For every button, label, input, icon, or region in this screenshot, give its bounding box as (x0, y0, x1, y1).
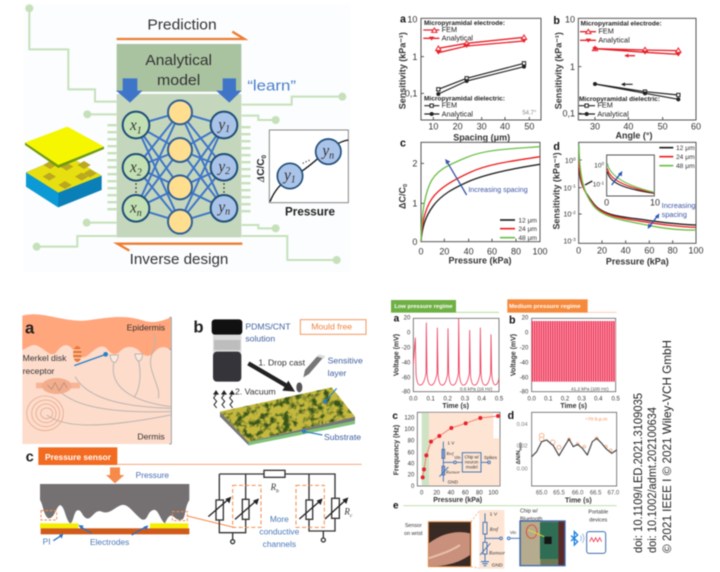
input nodes: 2 (137, 167, 142, 178)
pressure sensor banner (38, 447, 117, 465)
equivalent circuit: conductive (259, 527, 300, 537)
icon: portable device (587, 532, 606, 553)
frequency chart c: 100 (488, 490, 499, 496)
input nodes (123, 112, 149, 222)
icon: bluetooth signal (571, 532, 584, 545)
panel: sensitivity charts a and b (397, 14, 701, 142)
chart c: ΔC/C (397, 187, 407, 209)
pressure response mini chart: 1 (291, 175, 296, 186)
chart a (397, 14, 541, 142)
frequency chart c: 0 (411, 484, 415, 490)
heart rate chart d: 65.5 (553, 490, 565, 496)
chart d: 20 (597, 246, 607, 256)
voltage chart b (509, 314, 620, 410)
chart c (397, 138, 547, 266)
chart d: 10 (563, 183, 572, 192)
inverse design arrow and label (117, 244, 242, 268)
chart c: 60 (487, 246, 497, 256)
voltage chart b: 20 (522, 316, 529, 322)
voltage divider circuit: Rsensor (488, 551, 505, 556)
icon: blue learn arrows (116, 78, 242, 103)
voltage chart a: 0.6 kPa (16 Hz) (460, 387, 493, 392)
voltage divider circuit: GND (492, 562, 503, 568)
wearable demo flow: Chip w/ (520, 508, 538, 514)
input nodes: x (130, 117, 137, 134)
heart rate chart d: ~70 b.p.m (585, 416, 607, 422)
frequency chart c: Rsensor (445, 469, 460, 474)
chart d: 0 (602, 161, 605, 166)
frequency chart c: 0 (420, 490, 424, 496)
fabrication b: 1. Drop cast (258, 358, 306, 368)
chart d: 10 (565, 156, 573, 165)
learn label: “learn” (247, 79, 296, 95)
pressure response mini chart: 0 (261, 155, 268, 159)
chart b: Micropyramidal dielectric: (579, 96, 660, 103)
voltage chart a: 0 (407, 331, 411, 337)
heart rate chart d (508, 410, 620, 505)
voltage chart b: 0.5 (612, 396, 620, 402)
frequency chart c: 40 (408, 461, 415, 467)
voltage chart a: -20 (402, 346, 411, 352)
chart a: Analytical (442, 34, 473, 43)
fabrication b: Sensitive (328, 355, 363, 365)
icon: solution vial (212, 319, 242, 382)
frequency chart c: Rref (445, 451, 454, 456)
voltage chart a: 20 (404, 316, 411, 322)
frequency chart c: 1 V (447, 440, 455, 445)
chart d: 10 (650, 198, 660, 208)
heart rate chart d: 0.00 (517, 466, 528, 472)
chart a: 50 (524, 121, 534, 131)
frequency chart c: 100 (404, 427, 415, 433)
fabrication b: 2. Vacuum (235, 386, 276, 396)
chart d: Sensitivity (kPa⁻¹) (552, 152, 562, 230)
chart d: d (553, 141, 560, 153)
voltage chart a: Time (s) (442, 403, 469, 410)
chart d: 0 (604, 198, 609, 208)
chart a: 0,1 (405, 89, 417, 99)
output nodes (211, 112, 237, 222)
voltage chart a: 0.0 (409, 396, 418, 402)
chart c: 2 (412, 159, 417, 169)
sensor cross-section (40, 484, 234, 534)
chart d: 10 (594, 162, 602, 169)
medium pressure regime tag (507, 299, 617, 313)
output nodes: n (225, 207, 230, 218)
chart c: 1 (412, 199, 417, 209)
voltage chart a: Voltage (mV) (394, 334, 401, 376)
doi and copyright notes (631, 340, 674, 553)
chart d: 0 (576, 246, 581, 256)
panel: pressure sensor structure (c) (26, 447, 362, 549)
chart b: 50 (658, 121, 668, 131)
equivalent circuit (208, 470, 353, 549)
prediction arrow and label (117, 17, 244, 39)
chart a: Analytical (442, 110, 473, 119)
chart a: 10 (407, 14, 417, 24)
chart d: 0 (573, 156, 576, 161)
chart d: 40 (621, 246, 631, 256)
chart c: 40 (464, 246, 474, 256)
chart c: 12 μm (518, 217, 537, 224)
low pressure regime tag (391, 300, 499, 313)
equivalent circuit: channels (263, 539, 296, 549)
doi and copyright notes: © 2021 IEEE I © 2021 Wiley-VCH GmbH (660, 340, 674, 553)
fabrication b: PDMS/CNT (245, 321, 291, 331)
equivalent circuit: b (276, 488, 279, 494)
chart c: 0 (418, 246, 423, 256)
frequency chart c: Chip w/ (464, 454, 480, 459)
wearable demo flow: Portable (588, 509, 608, 515)
chart c: Increasing spacing (468, 185, 528, 194)
voltage chart a (394, 314, 504, 410)
voltage chart b: -80 (520, 390, 529, 396)
frequency chart c: 80 (476, 490, 483, 496)
analytical model box: Analytical (145, 53, 212, 69)
chart d: 10 (563, 210, 572, 219)
voltage chart a: 0.5 (495, 396, 504, 402)
chart d: Pressure (kPa) (606, 256, 669, 266)
chart b: FEM (598, 27, 614, 36)
fabrication b: b (193, 317, 204, 336)
voltage chart b: 41.2 kPa (100 Hz) (571, 386, 609, 391)
chart a: Spacing (μm) (453, 132, 510, 142)
chart c: 0 (412, 237, 417, 247)
skin illustration a (22, 314, 171, 444)
frequency chart c: model (466, 464, 478, 469)
doi and copyright notes: doi: 10.1109/LED.2021.3109035 (631, 393, 645, 553)
chart b: 0,1 (562, 109, 575, 119)
chart b: 40 (623, 121, 633, 131)
heart rate chart d: 66.5 (590, 490, 602, 496)
voltage chart a: 0.1 (427, 396, 435, 402)
chart d: -3 (572, 237, 576, 242)
wearable demo flow: on wrist (404, 531, 423, 537)
chart b: Sensitivity (kPa⁻¹) (553, 32, 563, 109)
mould free badge (300, 320, 366, 334)
fabrication b: layer (328, 368, 347, 378)
heart rate chart d: 0.02 (517, 444, 528, 450)
frequency chart c: Frequency (Hz) (394, 425, 401, 475)
voltage divider circuit: Vin (510, 530, 517, 535)
voltage chart a: 0.3 (461, 396, 470, 402)
voltage chart b: 0.3 (578, 396, 586, 402)
frequency chart c: 60 (462, 490, 469, 496)
chart b: Micropyramidal electrode: (581, 21, 662, 28)
voltage chart a: 0.4 (478, 396, 486, 402)
heart rate chart d: 65.0 (536, 490, 548, 496)
output nodes: y (218, 158, 225, 175)
chart b: 60 (691, 121, 701, 131)
output nodes: 1 (225, 124, 230, 135)
wearable demo flow: Bluetooth (520, 516, 543, 522)
equivalent circuit: R (271, 482, 276, 492)
icon: 3D pressure sensor device (25, 127, 104, 207)
wearable demo flow: Sensor (405, 523, 422, 529)
input nodes: 1 (137, 125, 142, 136)
heart rate chart d: base (518, 442, 522, 451)
photo: chip board (520, 521, 565, 566)
frequency chart c: Vin (454, 455, 461, 460)
chart b: b (553, 15, 560, 27)
output nodes: 2 (225, 166, 230, 177)
voltage chart b: -60 (520, 376, 529, 382)
chart d: 10 (593, 182, 600, 189)
pressure response mini chart: ... (298, 152, 312, 167)
voltage chart b: 0.1 (544, 396, 553, 402)
frequency chart c: 20 (408, 472, 415, 478)
heart rate chart d: 0.04 (517, 422, 528, 428)
heart rate chart d: d (508, 410, 514, 422)
heart rate chart d: Time (s) (565, 498, 592, 505)
inset sensor circuit (439, 442, 490, 482)
hidden layer nodes (168, 100, 192, 234)
chart c: 48 μm (518, 235, 537, 242)
chart a: 30 (477, 121, 487, 131)
chart a: 54.7° (522, 110, 537, 116)
frequency chart c (392, 411, 500, 504)
electrode and PI labels: Electrodes (90, 537, 129, 547)
frequency chart c: 80 (408, 439, 415, 445)
voltage chart b: 0 (525, 331, 529, 337)
equivalent circuit: R (344, 507, 350, 517)
frequency chart c: Spikes (484, 455, 497, 460)
voltage chart b: 0.4 (594, 396, 603, 402)
voltage chart a: a (394, 314, 400, 325)
chart d: -1 (572, 184, 576, 189)
chart b: 1 (570, 62, 575, 72)
chart d (552, 141, 703, 266)
chart d: Increasing (662, 201, 695, 210)
frequency chart c: c (392, 411, 398, 422)
chart d: 48 μm (676, 163, 695, 170)
frequency chart c: 40 (448, 490, 455, 496)
chart a: Micropyramidal dielectric: (424, 95, 505, 102)
panel: pressure sensor structure (c): c (26, 449, 34, 465)
heart rate chart d: 67.0 (608, 490, 620, 496)
panel: frequency response, heart rate and wearable demo: e (393, 500, 399, 511)
chart c: 0 (403, 184, 409, 187)
pressure response mini chart: n (329, 150, 334, 161)
chart d: 24 μm (676, 154, 695, 161)
chart a: 1 (412, 52, 417, 62)
voltage chart b: Voltage (mV) (511, 334, 518, 376)
chart b: 30 (590, 121, 600, 131)
frequency chart c: GND (448, 479, 459, 484)
chart c: 80 (511, 246, 521, 256)
electrode and PI labels (43, 525, 148, 547)
chart d: 80 (668, 246, 678, 256)
chart c: 24 μm (518, 226, 537, 233)
chart a: FEM (442, 25, 457, 34)
wearable demo flow (404, 508, 608, 569)
fabrication b (193, 317, 366, 445)
voltage chart a: -80 (402, 390, 411, 396)
panel: skin mechanoreceptors (a) and mould-free fabrication (b) (22, 314, 366, 445)
pressure sensor banner: Pressure sensor (45, 452, 112, 462)
voltage chart a: -40 (402, 361, 411, 367)
output nodes: y (218, 116, 225, 133)
chart a: 40 (500, 121, 510, 131)
electrode and PI labels: PI (43, 537, 51, 547)
skin illustration a: Merkel disk (23, 353, 67, 363)
chart d: -2 (572, 210, 576, 215)
low pressure regime tag: Low pressure regime (394, 304, 453, 310)
input nodes: n (137, 208, 142, 219)
pressure response mini chart: Pressure (285, 206, 335, 219)
chart b: 10 (565, 14, 575, 24)
panel: low/medium pressure voltage charts (391, 299, 620, 410)
voltage chart a: -60 (402, 376, 411, 382)
skin illustration a: a (25, 318, 35, 337)
pressure response mini chart: ΔC/C (256, 159, 267, 182)
skin illustration a: receptor (23, 366, 55, 376)
input nodes: x (130, 200, 137, 217)
chart d: 60 (644, 246, 654, 256)
chart d: spacing (662, 210, 687, 219)
chart d: 12 μm (676, 145, 695, 152)
skin illustration a: Epidermis (127, 323, 166, 333)
pressure response mini chart: y (322, 143, 329, 160)
chart c: Pressure (kPa) (449, 256, 511, 266)
panel: charts c and d (397, 138, 703, 266)
voltage chart b: b (509, 314, 516, 326)
panel: neural network inverse design (24, 3, 350, 272)
voltage chart b: Time (s) (560, 403, 587, 410)
frequency chart c: neuron (465, 459, 479, 464)
chart b (553, 14, 701, 140)
chart c: 20 (439, 246, 449, 256)
chart a: a (400, 14, 406, 26)
chart d: 100 (688, 246, 703, 256)
panel: pressure sensor structure (c): Pressure (136, 470, 169, 480)
frequency chart c: 120 (404, 415, 415, 421)
heart rate chart d: 66.0 (572, 490, 584, 496)
mould free badge: Mould free (311, 322, 352, 332)
voltage divider circuit: 1 V (490, 512, 498, 518)
icon: drop-cast arrow and pen (248, 354, 325, 392)
voltage chart b: 0.2 (561, 396, 570, 402)
chart c: c (400, 138, 406, 150)
chart c: 100 (532, 246, 547, 256)
frequency chart c: Pressure (kPa) (433, 497, 482, 504)
chart a: Sensitivity (kPa⁻¹) (397, 32, 407, 109)
skin illustration a: Dermis (137, 431, 165, 441)
icon: pressure arrow (106, 467, 124, 483)
inverse design arrow and label: Inverse design (130, 252, 228, 268)
chart b: FEM (597, 101, 613, 110)
icon: vacuum arrows (213, 390, 235, 408)
chart a: Micropyramidal electrode: (424, 20, 505, 27)
frequency chart c: 20 (433, 490, 441, 496)
pressure response mini chart: y (284, 167, 291, 184)
output nodes: y (218, 199, 225, 216)
chart d: 10 (563, 237, 572, 246)
chart a: 10 (428, 121, 438, 131)
medium pressure regime tag: Medium pressure regime (509, 304, 581, 310)
equivalent circuit: c (350, 513, 353, 519)
pressure response mini chart (256, 130, 348, 219)
voltage divider circuit (479, 510, 520, 569)
icon: Merkel receptors and nerves (47, 333, 171, 425)
voltage chart b: 0.0 (528, 396, 536, 402)
photo: sensor on wrist (428, 522, 471, 567)
input nodes: x (130, 159, 137, 176)
equivalent circuit: More (270, 514, 289, 524)
doi and copyright notes: doi: 10.1002/admt.202100634 (645, 407, 659, 553)
voltage chart b: -40 (520, 361, 529, 367)
analytical model box: model (157, 73, 200, 89)
panel: frequency response, heart rate and wearable demo (392, 410, 620, 569)
prediction arrow and label: Prediction (147, 17, 217, 33)
network connections (136, 112, 224, 222)
chart a: FEM (442, 101, 457, 110)
chart d: -1 (600, 180, 605, 185)
icon: substrate slab (217, 385, 358, 445)
voltage chart b: -20 (520, 346, 529, 352)
wearable demo flow: devices (589, 517, 608, 523)
chart a: 20 (453, 121, 463, 131)
fabrication b: solution (245, 334, 275, 344)
analytical model box (117, 44, 241, 92)
heart rate chart d: ΔN/N (516, 451, 522, 464)
frequency chart c: 60 (408, 450, 415, 456)
chart b: Angle (°) (615, 130, 653, 140)
chart b: Analytical (597, 110, 629, 119)
voltage chart a: 0.2 (444, 396, 452, 402)
fabrication b: Substrate (324, 432, 361, 442)
chart b: Analytical (598, 35, 630, 44)
voltage divider circuit: Rref (489, 528, 499, 533)
